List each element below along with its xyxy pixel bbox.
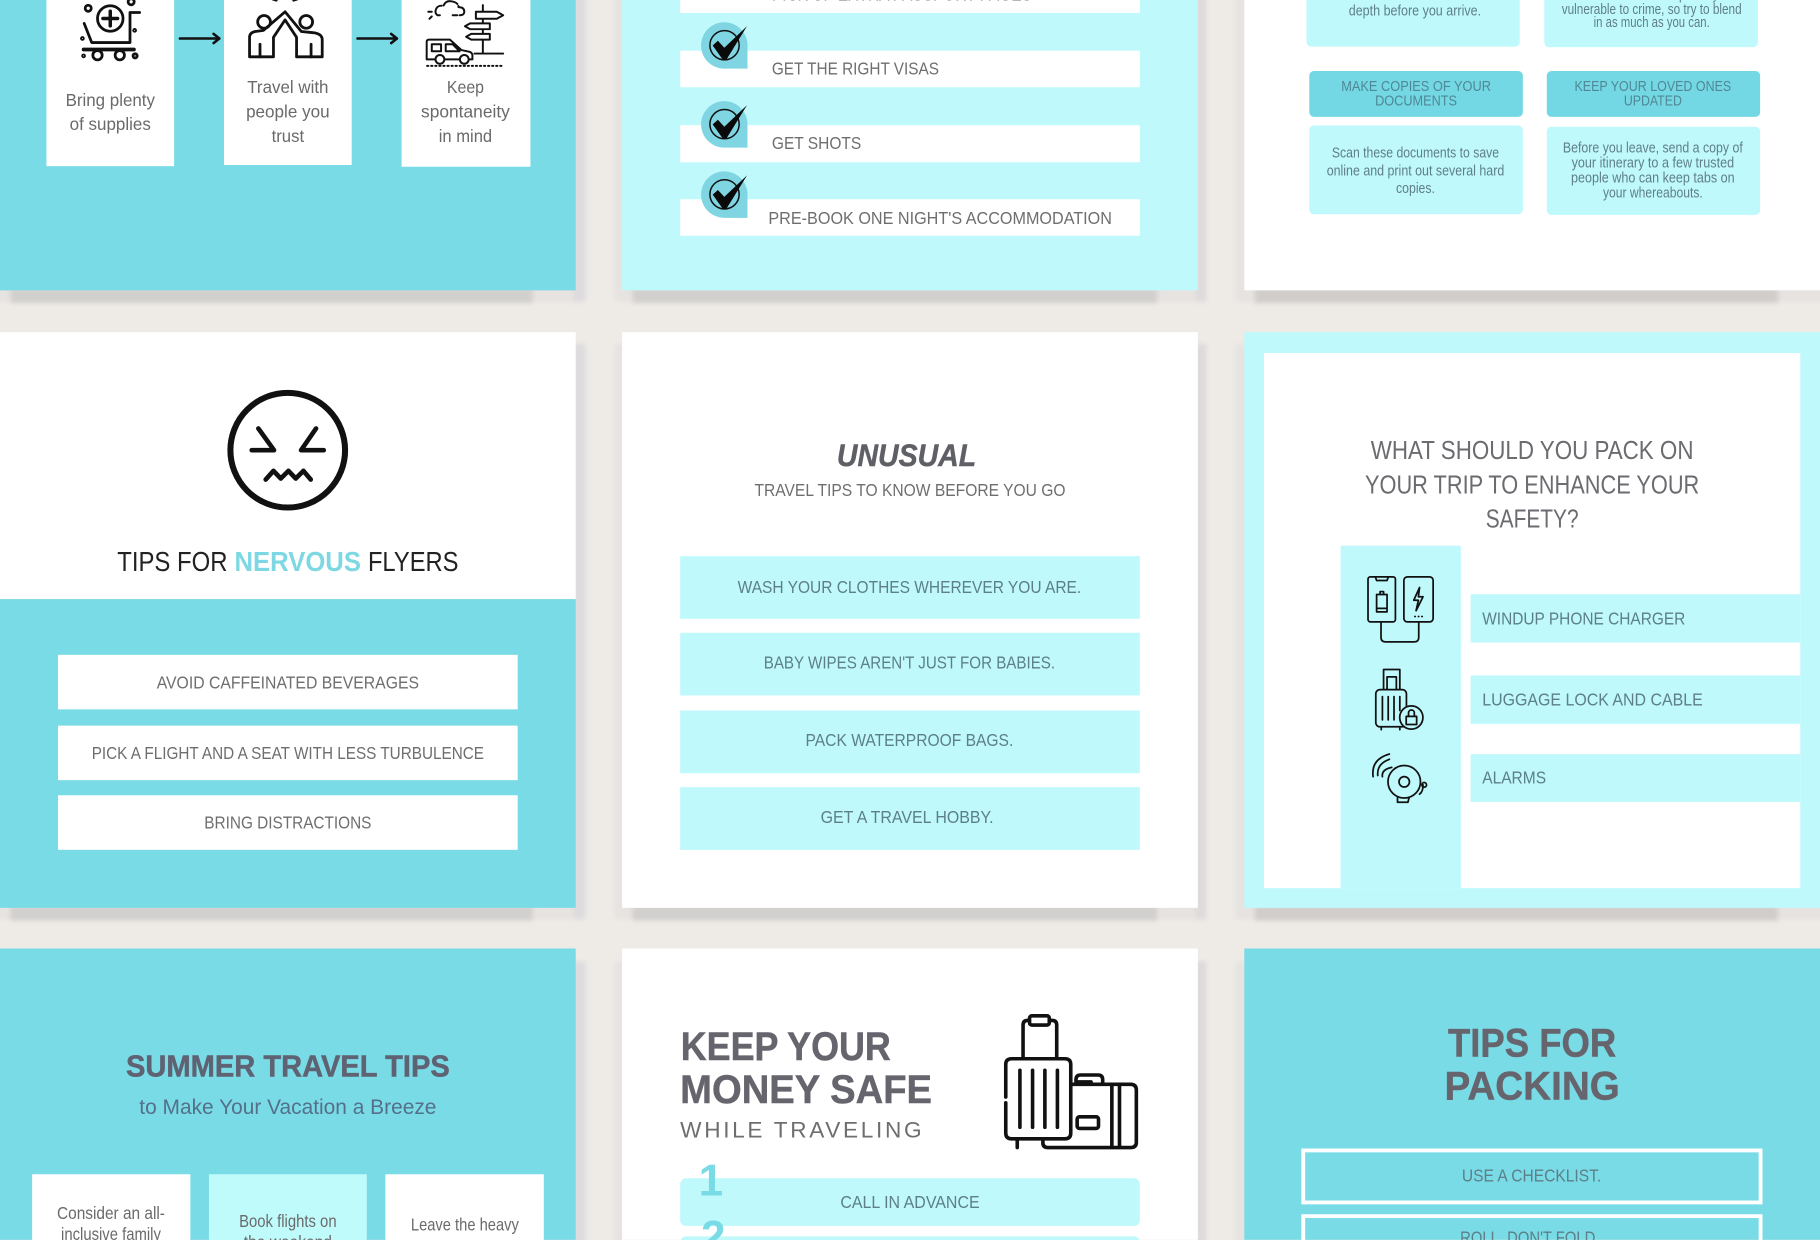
text: travel with people you trust: people you xyxy=(246,101,330,121)
heading: unusual: UNUSUAL xyxy=(837,438,976,473)
item: windup phone charger xyxy=(1471,594,1800,643)
card body: send itinerary: your whereabouts. xyxy=(1603,186,1703,202)
tip: roll, don't fold xyxy=(1303,1216,1761,1240)
tip: waterproof bags: PACK WATERPROOF BAGS. xyxy=(806,730,1013,750)
tip: waterproof bags xyxy=(680,711,1140,773)
arrow: step two to three xyxy=(358,34,397,43)
card: research destination: depth before you arrive. xyxy=(1349,4,1481,20)
icon: two people high five xyxy=(250,0,322,57)
heading: keep your money safe xyxy=(680,1025,932,1112)
icon: car, signpost and cloud xyxy=(427,1,503,66)
tip: baby wipes xyxy=(680,633,1140,695)
heading: tips for nervous flyers: FLYERS xyxy=(368,546,458,577)
tip: use a checklist xyxy=(1303,1150,1761,1202)
panel: summer travel tips xyxy=(0,948,576,1240)
item: call in advance xyxy=(680,1178,1140,1226)
card body: scan documents: copies. xyxy=(1396,181,1435,197)
checklist item: accommodation: PRE-BOOK ONE NIGHT'S ACCOMMODATION xyxy=(768,208,1112,228)
tip: avoid caffeinated beverages xyxy=(58,655,518,709)
checklist item: shots: GET SHOTS xyxy=(772,133,861,153)
card body: scan documents: Scan these documents to save xyxy=(1332,146,1499,162)
checklist item: visas: GET THE RIGHT VISAS xyxy=(772,59,939,79)
panel: travel safety steps xyxy=(0,0,576,290)
subheading: travel tips to know: TRAVEL TIPS TO KNOW BEFORE YOU GO xyxy=(754,480,1066,500)
card: blend in xyxy=(1544,0,1758,47)
icon: locked luggage xyxy=(1376,669,1423,730)
tip: wash your clothes: WASH YOUR CLOTHES WHEREVER YOU ARE. xyxy=(738,577,1081,597)
card: all-inclusive family: Consider an all- xyxy=(57,1203,165,1223)
tip: travel hobby: GET A TRAVEL HOBBY. xyxy=(821,807,994,827)
card: keep spontaneity in mind xyxy=(402,0,530,167)
heading: what should you pack: WHAT SHOULD YOU PACK ON xyxy=(1371,437,1693,465)
tip: baby wipes: BABY WIPES AREN'T JUST FOR BABIES. xyxy=(764,652,1055,672)
item: call in advance: CALL IN ADVANCE xyxy=(840,1192,980,1212)
card header: make copies of your documents: DOCUMENTS xyxy=(1375,93,1457,109)
heading: keep your money safe: MONEY SAFE xyxy=(680,1068,932,1112)
card: all-inclusive family xyxy=(32,1174,190,1240)
card header: keep your loved ones updated: KEEP YOUR LOVED ONES xyxy=(1575,79,1731,95)
tip: travel hobby xyxy=(680,787,1140,850)
heading: tips for packing: TIPS FOR xyxy=(1448,1022,1616,1066)
icon: phone and power bank xyxy=(1368,577,1433,642)
item: alarms xyxy=(1471,754,1800,802)
text: travel with people you trust: trust xyxy=(272,126,304,146)
subheading: while traveling: WHILE TRAVELING xyxy=(680,1117,922,1142)
heading: tips for nervous flyers: TIPS FOR xyxy=(117,546,228,577)
card: bring plenty of supplies xyxy=(46,0,174,166)
card: blend in: vulnerable to crime, so try to blend xyxy=(1562,2,1742,18)
heading: what should you pack: SAFETY? xyxy=(1486,505,1579,533)
subheading: to make your vacation a breeze: to Make Your Vacation a Breeze xyxy=(139,1095,436,1119)
panel: keep your money safe xyxy=(622,948,1198,1240)
card header: make copies of your documents xyxy=(1309,71,1523,117)
checklist item: shots xyxy=(680,101,1140,162)
heading: tips for nervous flyers xyxy=(117,546,458,577)
tip: use a checklist: USE A CHECKLIST. xyxy=(1462,1165,1601,1185)
heading: tips for packing xyxy=(1445,1022,1620,1109)
card header: keep your loved ones updated: UPDATED xyxy=(1624,93,1682,109)
item: alarms: ALARMS xyxy=(1482,767,1546,787)
card body: scan documents xyxy=(1309,126,1523,214)
icon column xyxy=(1341,546,1461,888)
card header: make copies of your documents: MAKE COPIES OF YOUR xyxy=(1341,79,1491,95)
item: second bar xyxy=(680,1236,1140,1240)
panel: pre-trip checklist xyxy=(622,0,1198,290)
item: luggage lock and cable xyxy=(1471,675,1800,724)
text: travel with people you trust: Travel with xyxy=(247,77,328,97)
heading: what should you pack xyxy=(1365,437,1699,533)
text: keep spontaneity in mind: Keep xyxy=(447,77,484,97)
heading: summer travel tips: SUMMER TRAVEL TIPS xyxy=(126,1050,450,1083)
item: luggage lock and cable: LUGGAGE LOCK AND CABLE xyxy=(1482,690,1703,710)
text: keep spontaneity in mind: spontaneity xyxy=(421,101,510,121)
heading: tips for packing: PACKING xyxy=(1445,1065,1620,1109)
icon: suitcases xyxy=(1006,1016,1136,1148)
card body: scan documents: online and print out several hard xyxy=(1327,164,1504,180)
number: 1: 1 xyxy=(699,1156,723,1205)
checklist item: visas xyxy=(680,22,1140,87)
text: bring plenty of supplies: Bring plenty xyxy=(66,90,155,110)
tip: bring distractions xyxy=(58,795,518,850)
heading: what should you pack: YOUR TRIP TO ENHANCE YOUR xyxy=(1365,472,1699,500)
checklist item: passport pages xyxy=(680,0,1140,13)
text: bring plenty of supplies xyxy=(66,90,155,134)
card: blend in: in as much as you can. xyxy=(1594,15,1710,31)
tip: bring distractions: BRING DISTRACTIONS xyxy=(204,813,371,833)
panel: tips for nervous flyers xyxy=(0,332,576,908)
heading: tips for nervous flyers: NERVOUS xyxy=(234,546,361,577)
card header: keep your loved ones updated xyxy=(1547,71,1760,117)
tip: pick a flight and seat xyxy=(58,726,518,780)
panel: unusual travel tips xyxy=(622,332,1198,908)
card: leave the heavy xyxy=(385,1174,544,1240)
text: travel with people you trust xyxy=(246,77,330,146)
text: bring plenty of supplies: of supplies xyxy=(70,114,151,134)
card body: send itinerary xyxy=(1547,127,1760,215)
card: leave the heavy: Leave the heavy xyxy=(411,1215,519,1235)
icon: supply cart xyxy=(81,0,140,60)
text: keep spontaneity in mind xyxy=(421,77,510,146)
card: research destination xyxy=(1306,0,1520,47)
panel: what to pack for safety xyxy=(1244,332,1820,908)
card: book flights xyxy=(209,1174,367,1240)
heading: keep your money safe: KEEP YOUR xyxy=(681,1025,891,1069)
tip: wash your clothes xyxy=(680,556,1140,619)
panel: safety advice cards xyxy=(1244,0,1820,290)
card: book flights: Book flights on xyxy=(239,1211,337,1231)
card: travel with people you trust xyxy=(224,0,352,165)
icon: nervous face xyxy=(230,393,345,508)
text: keep spontaneity in mind: in mind xyxy=(439,126,492,146)
checklist item: accommodation xyxy=(680,171,1140,236)
card body: send itinerary: your itinerary to a few trusted xyxy=(1572,156,1734,172)
tip: avoid caffeinated beverages: AVOID CAFFEINATED BEVERAGES xyxy=(157,673,419,693)
card body: send itinerary: people who can keep tabs on xyxy=(1571,171,1735,187)
item: windup phone charger: WINDUP PHONE CHARGER xyxy=(1482,608,1685,628)
arrow: step one to two xyxy=(180,34,219,43)
card body: send itinerary: Before you leave, send a copy of xyxy=(1563,140,1744,156)
panel: tips for packing xyxy=(1244,948,1820,1240)
icon: alarm bell xyxy=(1373,754,1427,802)
tip: pick a flight and seat: PICK A FLIGHT AND A SEAT WITH LESS TURBULENCE xyxy=(92,743,484,763)
